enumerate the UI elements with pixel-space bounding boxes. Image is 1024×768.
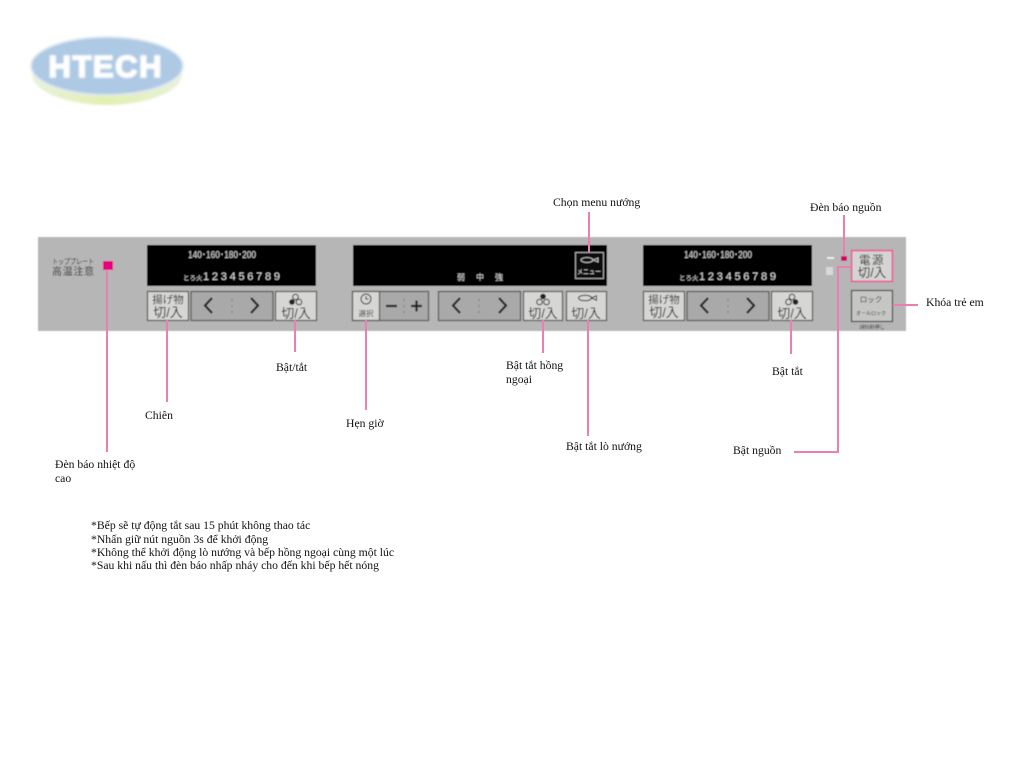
control panel <box>38 237 906 331</box>
leader line: power indicator <box>843 215 845 256</box>
timer button: 選択 <box>358 308 374 318</box>
notes: *Không thể khởi động lò nướng và bếp hồng ngoại cùng một lúc <box>91 546 394 559</box>
high temperature warning text: トッププレート <box>52 257 94 266</box>
right display: 123456789 <box>699 271 776 283</box>
child lock button: オールロック <box>856 311 886 317</box>
left burner button <box>276 292 316 321</box>
oven button <box>566 292 606 321</box>
label: power on: Bật nguồn <box>733 444 782 457</box>
leader line: grill menu <box>588 212 590 252</box>
centre arrow buttons <box>438 292 520 320</box>
leader line: timer <box>365 320 367 410</box>
label: right burner on/off: Bật tắt <box>772 365 804 378</box>
power indicator light <box>841 256 847 261</box>
child lock button: ロック <box>860 295 882 304</box>
label: infrared on/off <box>506 359 563 386</box>
centre display: 弱 <box>457 273 465 282</box>
label: grill menu: Chọn menu nướng <box>553 196 640 209</box>
centre display: 強 <box>495 272 503 282</box>
label: high temperature indicator <box>55 458 135 485</box>
label: burner on/off: Bật/tắt <box>276 361 308 374</box>
grill menu icon <box>576 252 604 278</box>
high temperature warning text <box>52 257 94 278</box>
label: oven on/off: Bật tắt lò nướng <box>566 440 642 453</box>
label: timer: Hẹn giờ <box>346 417 384 430</box>
leader line: power button <box>794 267 851 452</box>
left fry button <box>148 292 188 320</box>
small lock and status icons <box>826 258 834 275</box>
left display: 140･160･180･200 <box>188 250 256 261</box>
left fry button: 揚げ物 <box>152 293 184 306</box>
left display <box>147 245 316 286</box>
centre display <box>353 245 607 286</box>
leader line: burner on/off <box>294 320 296 352</box>
logo: HTECH <box>30 36 184 105</box>
label: high temperature indicator: cao <box>55 472 71 485</box>
infrared burner button <box>524 292 562 321</box>
right burner button <box>772 292 812 321</box>
right display <box>643 245 812 286</box>
right fry button: 切/入 <box>649 305 679 320</box>
high temperature warning text: 高温注意 <box>52 265 94 278</box>
label: fry: Chiên <box>145 409 173 422</box>
leader line: fry <box>166 320 168 402</box>
centre display: 中 <box>476 272 484 282</box>
power button: 切/入 <box>858 266 887 280</box>
infrared burner button: 切/入 <box>528 306 558 321</box>
right display: とろ火 <box>679 274 699 282</box>
power button: 電源 <box>859 253 885 267</box>
child lock button: 3秒5秒押し <box>859 324 885 331</box>
left display: 123456789 <box>203 271 280 283</box>
oven button: 切/入 <box>571 306 601 321</box>
notes: *Nhấn giữ nút nguồn 3s để khởi động <box>91 533 268 546</box>
notes <box>91 519 394 572</box>
grill menu icon: メニュー <box>577 269 601 276</box>
label: high temperature indicator: Đèn báo nhiệt độ <box>55 458 135 471</box>
right display: 140･160･180･200 <box>684 250 752 261</box>
notes: *Sau khi nấu thì đèn báo nhấp nháy cho đến khi bếp hết nóng <box>91 559 379 572</box>
label: power indicator: Đèn báo nguồn <box>810 201 882 214</box>
right arrow buttons <box>687 292 769 320</box>
left fry button: 切/入 <box>153 305 183 320</box>
power button <box>852 250 892 282</box>
child lock button <box>852 290 892 331</box>
leader line: oven <box>587 320 589 436</box>
label: infrared on/off: Bật tắt hồng <box>506 359 563 372</box>
right burner button: 切/入 <box>777 306 807 321</box>
notes: *Bếp sẽ tự động tắt sau 15 phút không thao tác <box>91 519 310 532</box>
right fry button: 揚げ物 <box>648 293 680 306</box>
high temperature indicator light <box>103 261 113 270</box>
leader line: right burner <box>790 320 792 354</box>
leader line: child lock <box>893 304 918 306</box>
left arrow buttons <box>191 292 273 320</box>
leader line: high temperature <box>106 270 108 452</box>
label: child lock: Khóa trẻ em <box>926 296 984 309</box>
left display: とろ火 <box>183 274 203 282</box>
right fry button <box>644 292 684 320</box>
left burner button: 切/入 <box>281 306 311 321</box>
logo: HTECH: HTECH <box>48 49 162 84</box>
leader line: infrared <box>542 320 544 353</box>
label: infrared on/off: ngoại <box>506 373 533 386</box>
timer button <box>352 292 428 320</box>
